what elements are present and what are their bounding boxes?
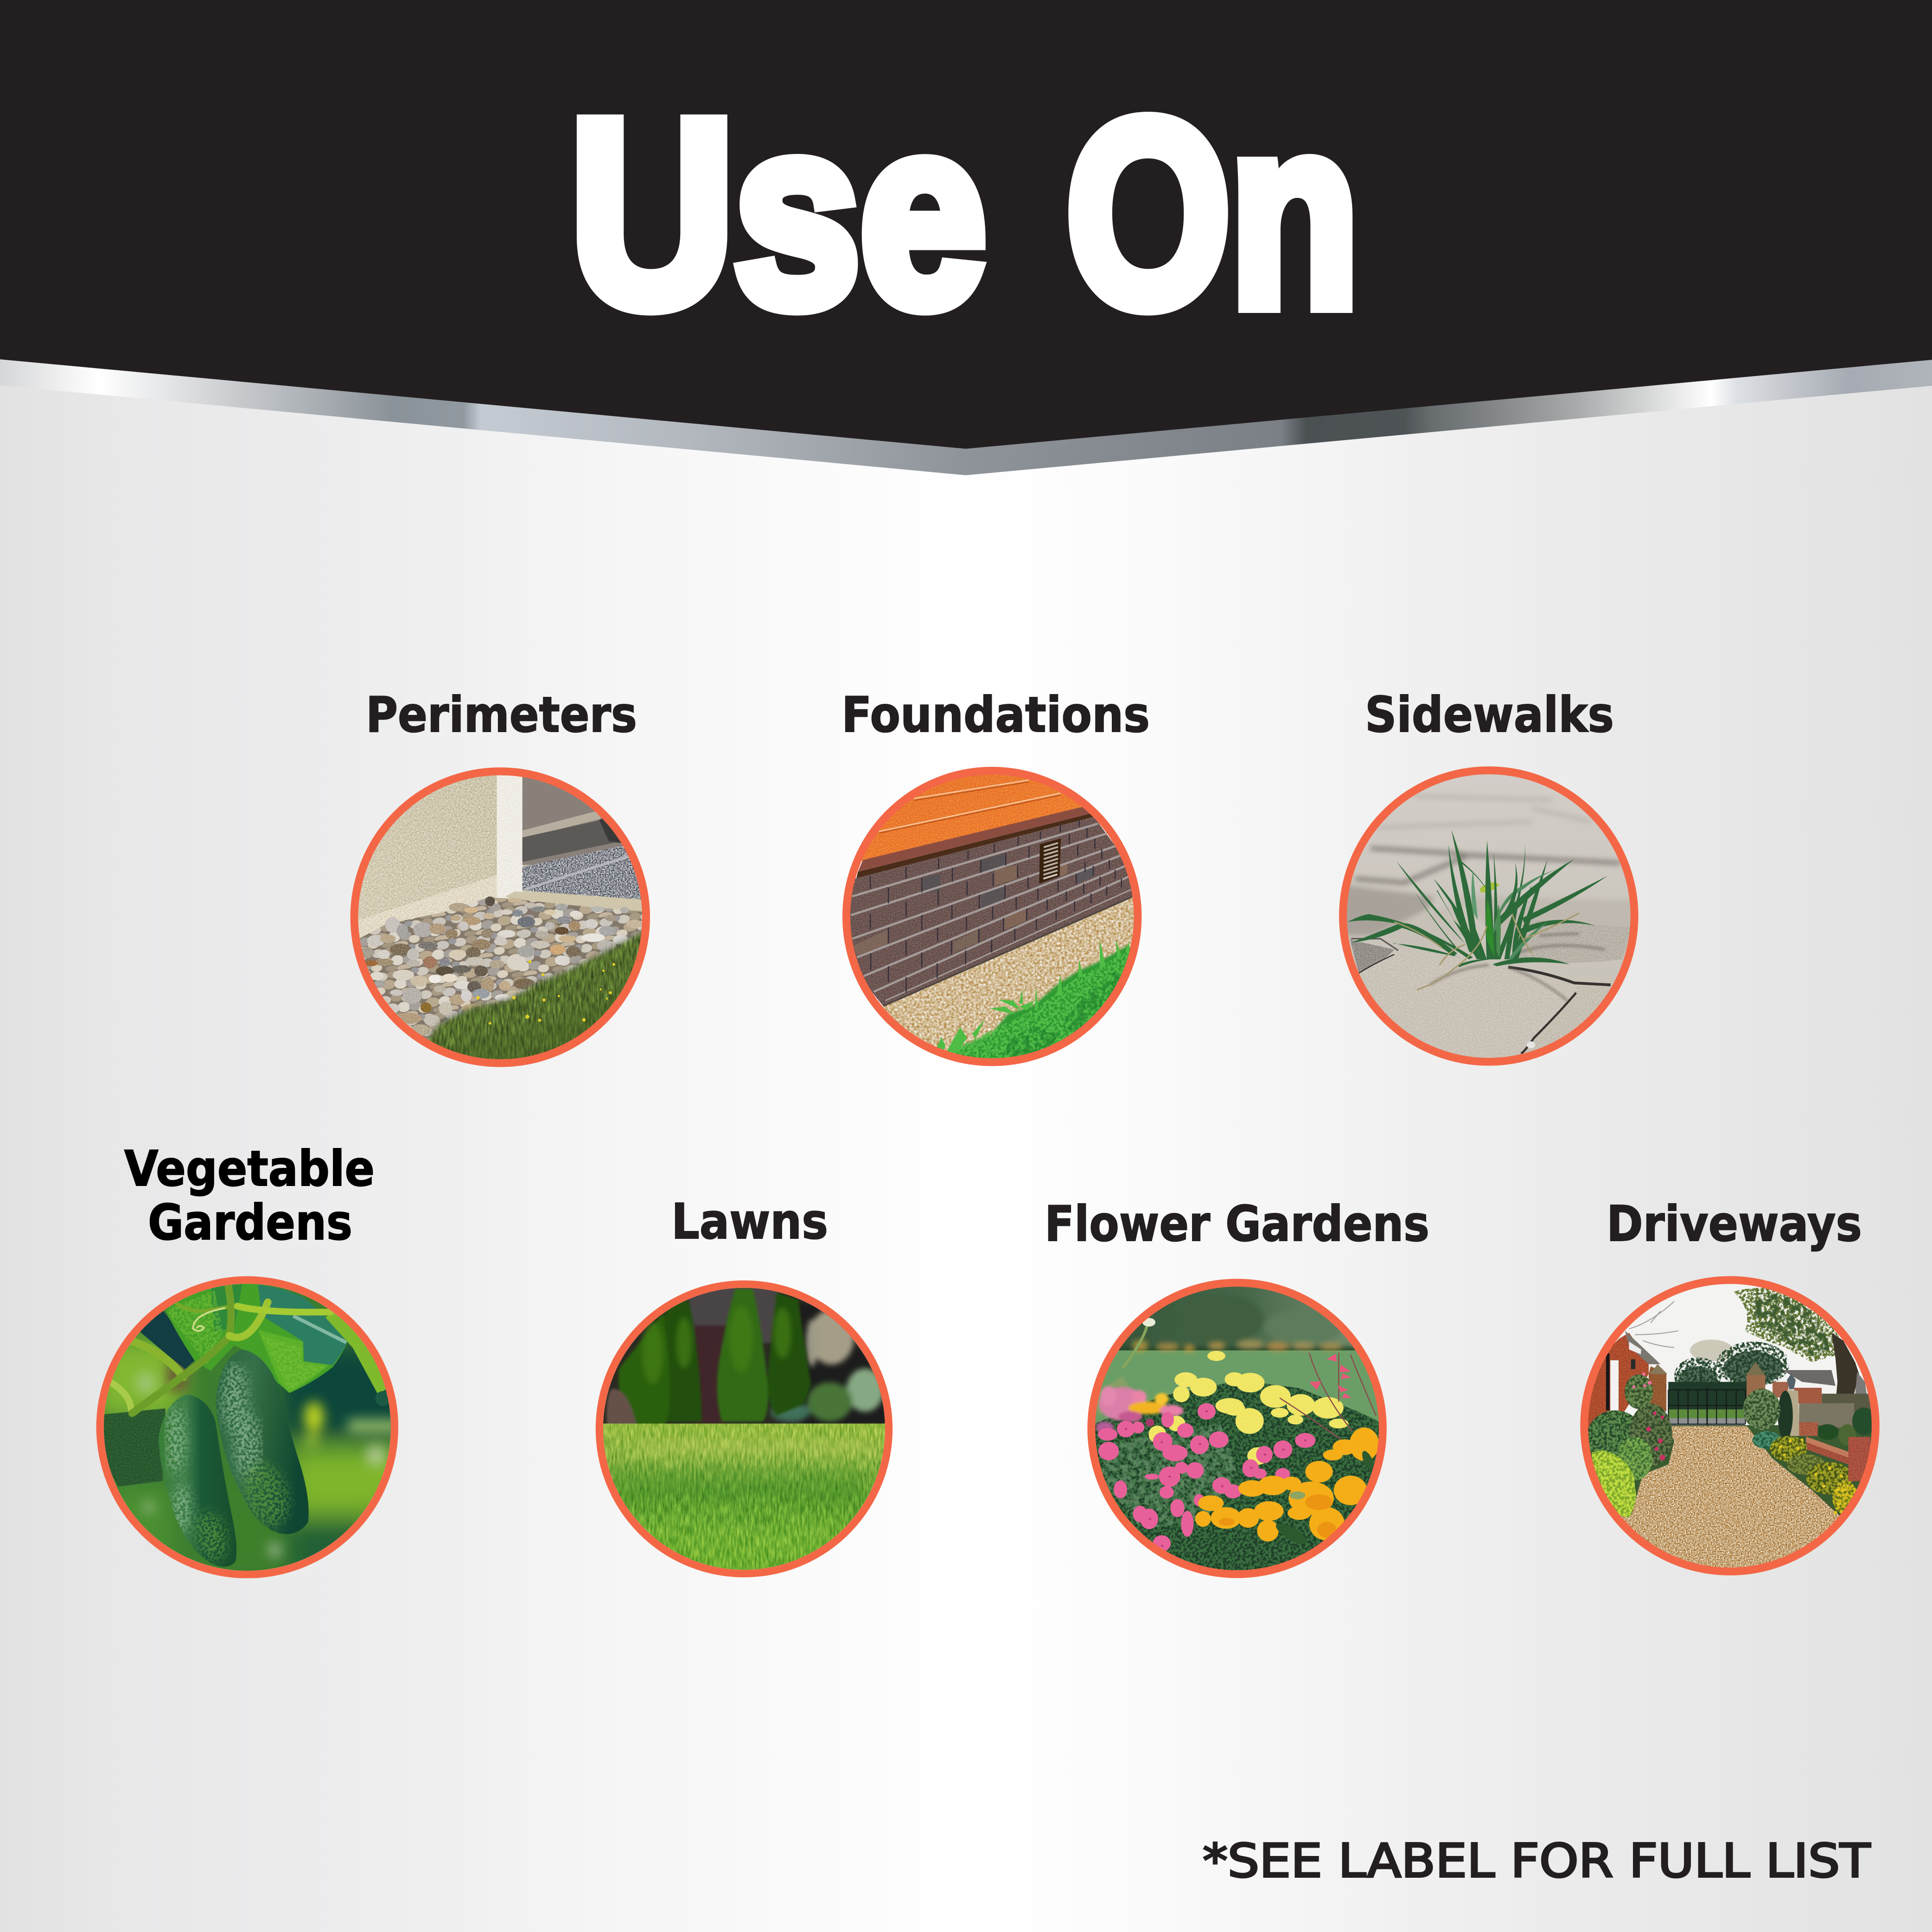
orange daisies [1195, 1428, 1379, 1542]
background blooms [1096, 1386, 1183, 1434]
foliage [1083, 1380, 1391, 1582]
photo: green lawn and arborvitae [590, 1274, 898, 1582]
bare tree [1629, 1301, 1678, 1347]
label: vegetable gardens: Vegetable [124, 1141, 375, 1197]
bushes left [1587, 1374, 1672, 1518]
right tree foliage [1733, 1288, 1840, 1362]
header banner [0, 0, 1932, 449]
photo: brick foundation with wood siding [838, 763, 1147, 1071]
label: foundations: Foundations [842, 687, 1150, 743]
ring [100, 1280, 395, 1575]
photo: weeds growing between pavers [1335, 763, 1644, 1071]
grass tuft [1347, 829, 1607, 990]
fence [1799, 1403, 1854, 1429]
photo: gravel driveway with gate [1576, 1272, 1884, 1580]
title: On [1066, 65, 1359, 361]
gaura sprays [1280, 1353, 1376, 1439]
label: flower gardens: Flower Gardens [1045, 1196, 1429, 1252]
panel: lawns [590, 1193, 898, 1582]
label: vegetable gardens [124, 1141, 375, 1251]
yellow wildflowers [476, 960, 615, 1025]
label: perimeters: Perimeters [366, 687, 637, 743]
photo: gravel perimeter beside a wall [345, 763, 654, 1071]
panel: sidewalks [1335, 687, 1644, 1071]
vine leaf [166, 1283, 347, 1393]
trunk [1831, 1333, 1859, 1405]
gate [1668, 1388, 1746, 1425]
title [570, 65, 1359, 361]
green weeds [937, 940, 1147, 1071]
brick wall [1799, 1422, 1870, 1481]
label: vegetable gardens: Gardens [148, 1194, 352, 1251]
label: driveways: Driveways [1607, 1196, 1862, 1252]
panel: foundations [838, 687, 1150, 1071]
photo: cucumbers on the vine [93, 1273, 417, 1581]
title: Use [570, 65, 986, 361]
petunias [1098, 1403, 1315, 1552]
paver cracks and shadows [1351, 939, 1611, 1054]
barn roof and walls [1782, 1370, 1836, 1386]
metallic chevron band [0, 359, 1932, 475]
label: lawns: Lawns [671, 1193, 828, 1250]
panel: flower gardens [1045, 1196, 1429, 1582]
footnote: *SEE LABEL FOR FULL LIST [1203, 1834, 1871, 1888]
panel: perimeters [345, 687, 654, 1071]
ring [599, 1284, 889, 1574]
ring [1343, 771, 1634, 1062]
marigolds [1148, 1351, 1349, 1465]
right gate pillar [1747, 1375, 1765, 1405]
brick house [1584, 1333, 1666, 1439]
ring [1091, 1283, 1383, 1574]
photo: flower bed [1064, 1255, 1417, 1582]
label: sidewalks: Sidewalks [1365, 687, 1614, 743]
dark lower leaf [103, 1409, 166, 1486]
lantern and stone post [1787, 1374, 1796, 1390]
stems and tendrils [111, 1287, 331, 1413]
vent [1039, 838, 1061, 884]
panel: driveways [1576, 1196, 1884, 1580]
back trees [1690, 1339, 1733, 1361]
cucumbers [159, 1349, 309, 1567]
panel: vegetable gardens [93, 1141, 417, 1581]
bushes right [1743, 1389, 1876, 1515]
brick tones [853, 853, 1094, 956]
ring [846, 771, 1138, 1062]
mortar lines [851, 823, 1131, 1001]
gravel driveway [1576, 1426, 1884, 1580]
brick joints [870, 820, 1122, 993]
ring [1584, 1280, 1875, 1571]
ring [354, 772, 646, 1063]
